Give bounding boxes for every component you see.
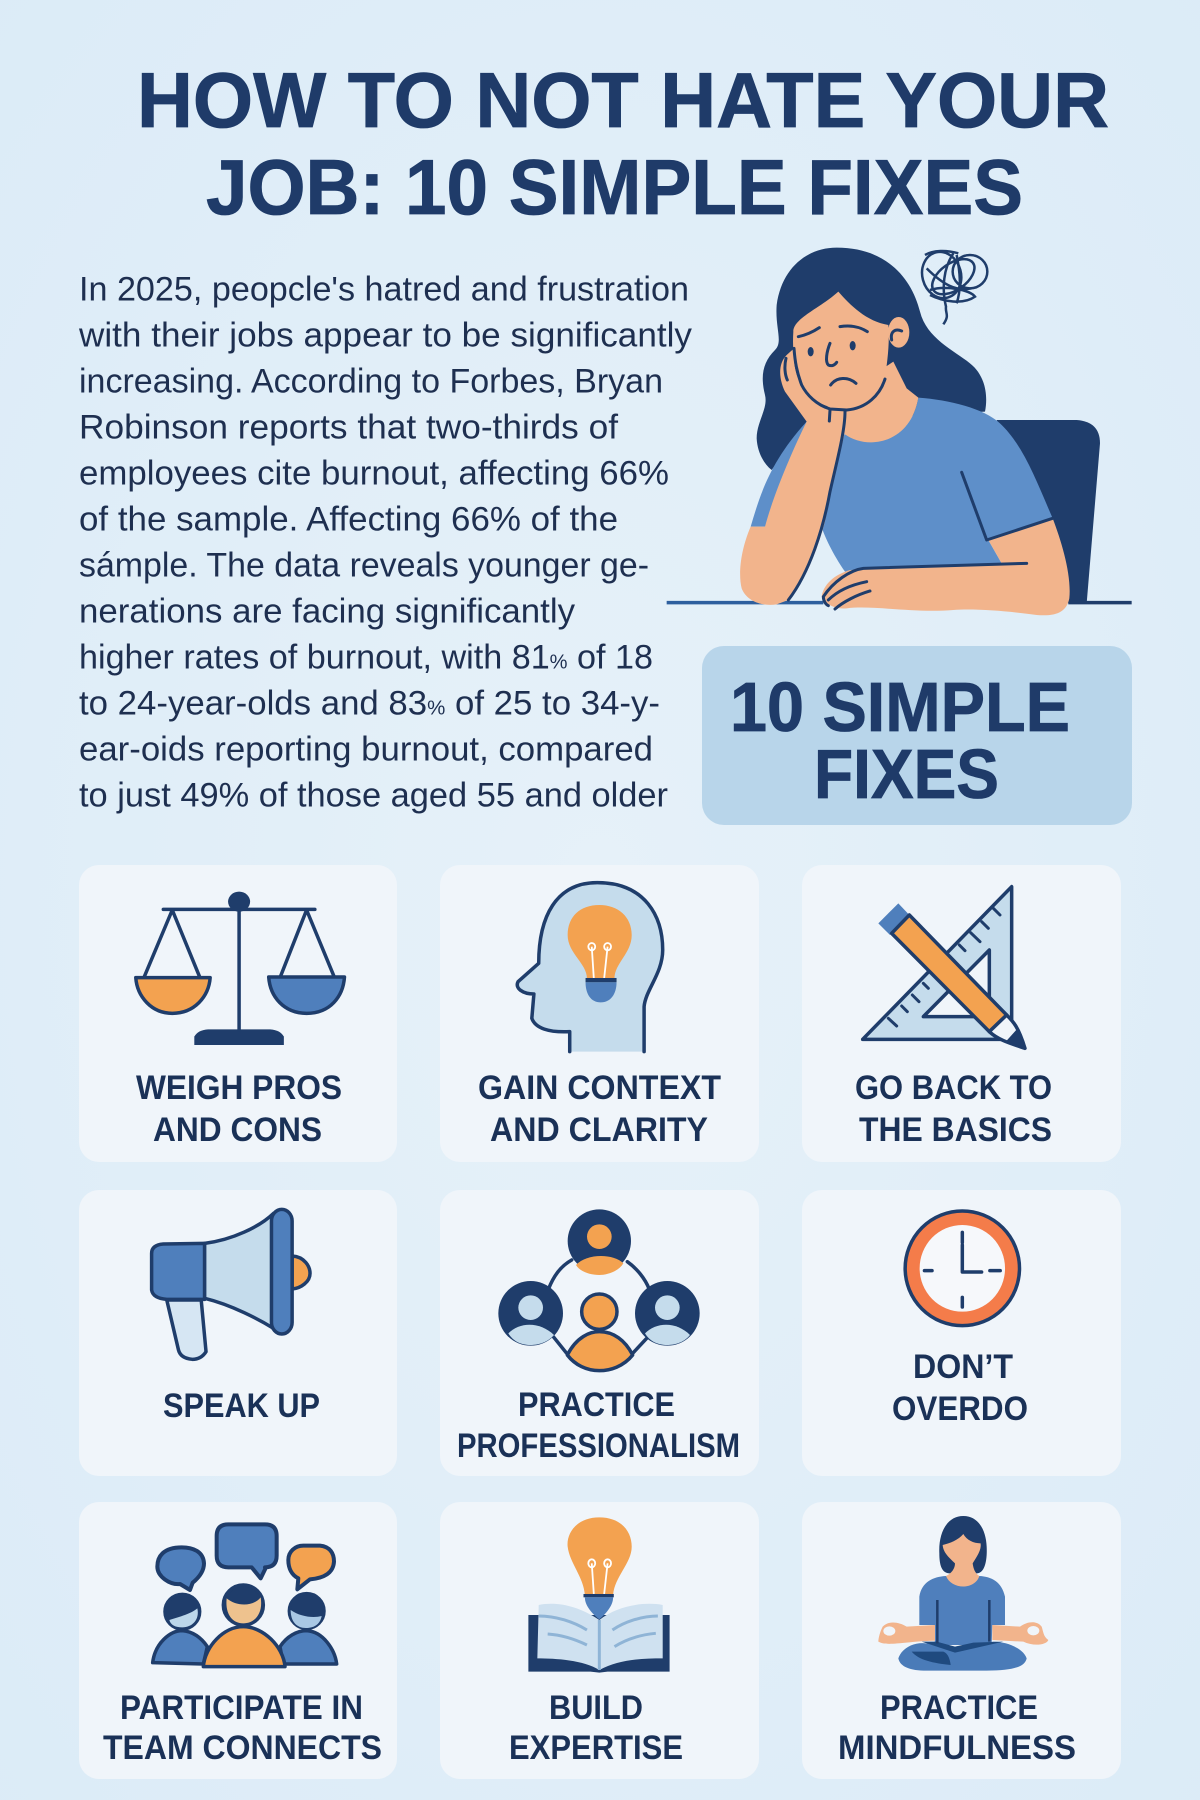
icon: book with light bulb <box>528 1517 670 1673</box>
intro text block: nerations are facing significantly <box>79 592 575 630</box>
panel: participate in team connects <box>79 1502 397 1779</box>
title: JOB: 10 SIMPLE FIXES <box>206 143 1023 231</box>
icon: megaphone <box>152 1209 310 1359</box>
scribble icon <box>917 247 987 324</box>
panel: gain context and clarity: AND CLARITY <box>490 1111 708 1149</box>
icon: team with speech bubbles <box>153 1524 337 1667</box>
panel: don't overdo <box>802 1190 1121 1476</box>
icon: set square and pencil <box>863 887 1025 1048</box>
icon: clock <box>905 1211 1019 1326</box>
intro text block: with their jobs appear to be significantly <box>78 316 692 354</box>
intro text block: of the sample. Affecting 66% of the <box>79 500 618 538</box>
intro text block: to 24-year-olds and 83 % of 25 to 34-y- <box>79 684 660 722</box>
panel: weigh pros and cons: AND CONS <box>153 1111 322 1149</box>
panel: don't overdo: DON’T <box>913 1348 1013 1386</box>
icon: connected people <box>498 1209 700 1371</box>
panel: go back to the basics: THE BASICS <box>859 1111 1052 1149</box>
callout: 10 simple fixes <box>702 646 1132 825</box>
panel: go back to the basics <box>802 865 1121 1162</box>
panel: weigh pros and cons <box>79 865 397 1162</box>
panel: gain context and clarity: GAIN CONTEXT <box>478 1069 721 1107</box>
panel: practice professionalism: PRACTICE <box>518 1386 675 1424</box>
panel: gain context and clarity <box>440 865 759 1162</box>
callout: 10 simple fixes: 10 SIMPLE <box>730 668 1070 746</box>
panel: practice professionalism: PROFESSIONALISM <box>457 1427 740 1465</box>
callout: 10 simple fixes: FIXES <box>814 735 999 813</box>
panel: weigh pros and cons: WEIGH PROS <box>136 1069 342 1107</box>
panel: go back to the basics: GO BACK TO <box>855 1069 1052 1107</box>
intro text block: ear-oids reporting burnout, compared <box>79 730 653 768</box>
intro text block: to just 49% of those aged 55 and older <box>79 776 668 814</box>
panel: participate in team connects: PARTICIPATE IN <box>120 1689 363 1727</box>
panel: practice mindfulness: PRACTICE <box>880 1689 1038 1727</box>
icon: head with light bulb <box>517 883 663 1052</box>
intro text block: In 2025, peopcle's hatred and frustration <box>79 270 689 308</box>
title <box>137 56 1109 231</box>
intro text block: Robinson reports that two-thirds of <box>79 408 619 446</box>
panel: build expertise: EXPERTISE <box>509 1729 683 1767</box>
panel: practice mindfulness: MINDFULNESS <box>838 1729 1076 1767</box>
intro text block: higher rates of burnout, with 81% of 18 <box>79 638 653 676</box>
intro text block <box>78 270 692 814</box>
panel: practice mindfulness <box>802 1502 1121 1779</box>
panel: practice professionalism <box>440 1190 759 1476</box>
panel: build expertise <box>440 1502 759 1779</box>
intro text block: increasing. According to Forbes, Bryan <box>79 362 663 400</box>
icon: balance scale <box>136 892 344 1045</box>
intro text block: employees cite burnout, affecting 66% <box>79 454 669 492</box>
intro text block: sámple. The data reveals younger ge- <box>79 546 649 584</box>
illustration: frustrated woman at desk <box>667 247 1132 615</box>
panel: speak up <box>79 1190 397 1476</box>
icon: meditating person <box>878 1516 1048 1671</box>
panel: build expertise: BUILD <box>549 1689 643 1727</box>
panel: speak up: SPEAK UP <box>163 1387 320 1425</box>
panel: don't overdo: OVERDO <box>892 1390 1028 1428</box>
title: HOW TO NOT HATE YOUR <box>137 56 1109 144</box>
panel: participate in team connects: TEAM CONNECTS <box>103 1729 382 1767</box>
